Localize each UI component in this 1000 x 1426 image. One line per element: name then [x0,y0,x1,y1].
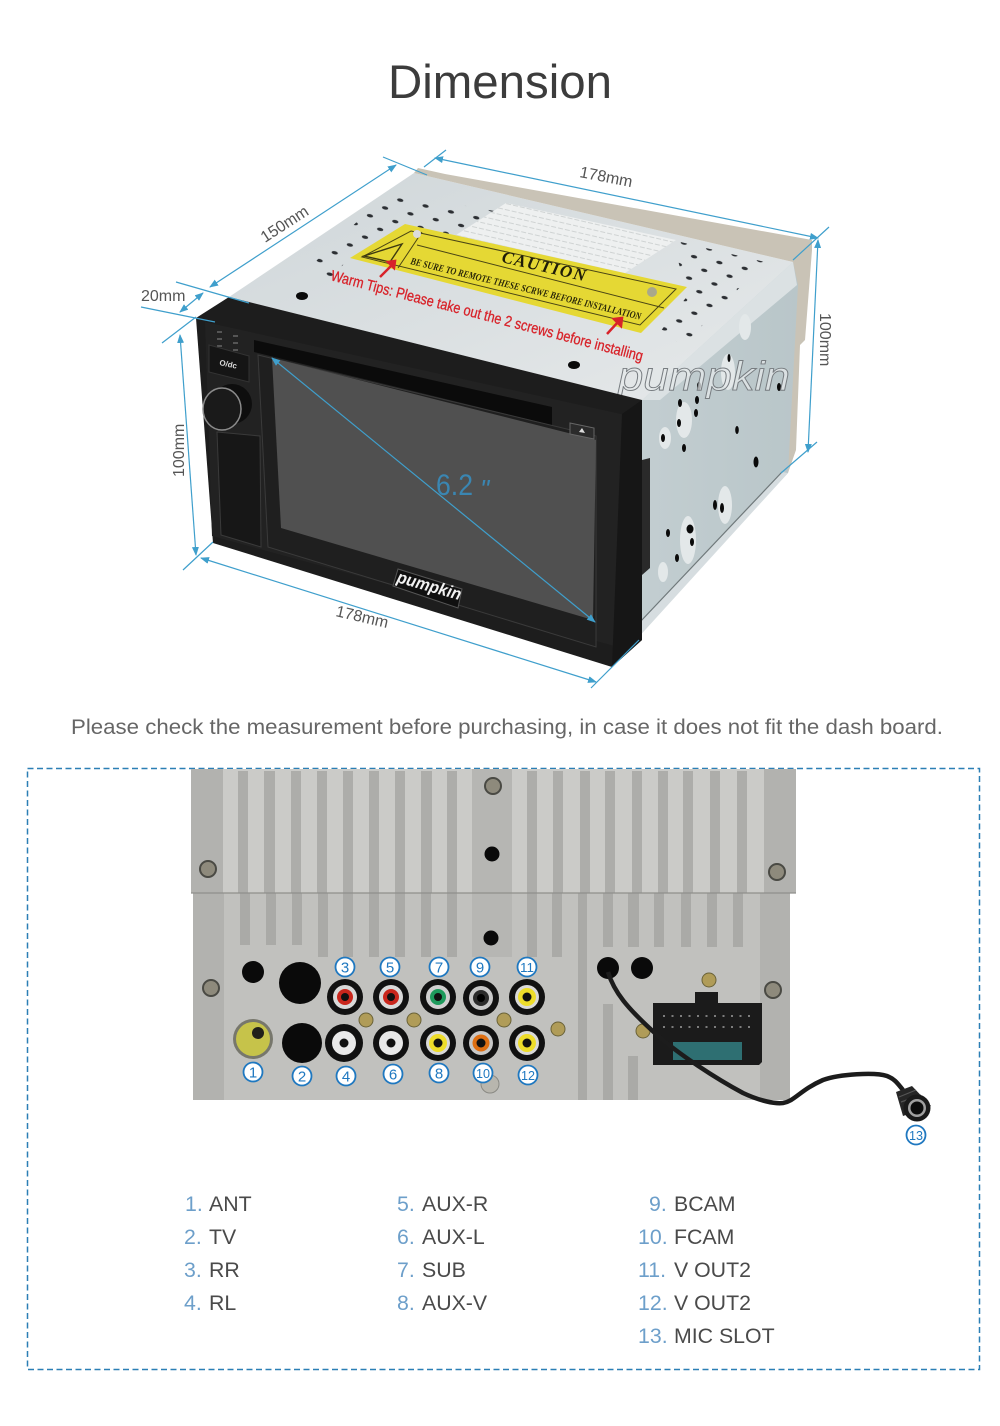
side panel lower strip [636,472,788,640]
side columns [191,769,796,1100]
warning triangle [364,244,402,262]
volume knob [203,384,252,430]
legend column 3: V OUT2 [674,1258,751,1282]
legend column 3: V OUT2 [674,1291,751,1315]
port number markers [244,958,926,1144]
marker 4 [336,1066,356,1086]
marker 3 [336,958,354,976]
RCA jack 9 [463,980,499,1016]
marker 10: 10 [476,1066,490,1081]
legend column 2: 7. [397,1258,415,1282]
marker 5: 5 [386,960,394,976]
microphone jack [896,1086,931,1122]
RCA jack 3 [327,979,363,1015]
RCA jack 12 [509,1025,545,1061]
marker 8 [430,1064,448,1082]
screen diagonal measure [272,358,595,622]
rear tan rim [414,168,812,473]
legend column 1: ANT [209,1192,252,1216]
legend column 2: AUX-R [422,1192,488,1216]
warm tips text: Warm Tips: Please take out the 2 screws before installing [329,267,645,365]
marker 8: 8 [435,1066,443,1082]
RCA jack 7 [420,979,456,1015]
centre block [472,769,512,957]
marker 2 [292,1066,312,1086]
side edge of frame [612,400,642,667]
legend column 1 [184,1192,252,1315]
side mounting tab [642,458,650,575]
100mm left line [180,335,196,555]
legend column 2 [397,1192,488,1315]
screen diagonal measure: " [480,474,491,504]
preset markers [217,332,238,350]
marker 9 [470,958,490,976]
caution label: BE SURE TO REMOTE THESE SCRWE BEFORE INSTALLATION [409,256,643,323]
marker 12: 12 [521,1068,535,1083]
screen bezel [258,355,596,647]
screw holes in top plate [296,292,580,369]
RCA jack 4 [325,1024,363,1062]
marker 13 [906,1126,926,1144]
depth label: 150mm [258,203,312,246]
marker 4: 4 [342,1068,350,1086]
legend column 2: 5. [397,1192,415,1216]
178mm bottom line [201,558,596,682]
top cover plate [229,173,793,400]
legend column 3: 11. [638,1258,666,1282]
marker 1: 1 [249,1064,257,1082]
legend column 1: RR [209,1258,240,1282]
legend column 3: 9. [649,1192,667,1216]
legend column 3: MIC SLOT [674,1324,775,1348]
lower centre screw [481,1075,499,1093]
upper fins [238,771,747,893]
legend column 3: BCAM [674,1192,736,1216]
legend column 3: FCAM [674,1225,734,1249]
brass screws [359,973,716,1038]
150mm line [210,165,396,287]
side panel holes [661,354,781,562]
marker 6: 6 [389,1066,397,1084]
legend column 1: 3. [184,1258,202,1282]
legend column 2: AUX-L [422,1225,485,1249]
left height label: 100mm [171,424,188,477]
lower casing [193,893,790,1100]
ventilation dots right [660,240,765,345]
178mm top line [435,158,818,238]
RCA jack 8 [420,1025,456,1061]
dimension labels [141,164,833,632]
front logo: pumpkin [394,567,464,604]
bottom width label: 178mm [334,603,390,632]
screen diagonal measure: 6.2 [436,469,473,502]
upper casing [191,769,796,893]
legend column 3 [638,1192,775,1348]
legend column 2: AUX-V [422,1291,488,1315]
marker 7 [430,958,448,976]
marker 11: 11 [520,960,534,975]
bezel label: 20mm [141,288,185,305]
caution label [350,224,687,333]
title: Dimension [388,55,612,108]
RCA jack 11 [509,979,545,1015]
legend column 2: SUB [422,1258,466,1282]
20mm line [180,293,203,312]
lower fins [240,893,743,1100]
white sticker [456,203,676,273]
upper side chamfer [642,262,797,400]
top width label: 178mm [578,164,634,191]
dashed panel border [28,768,980,1370]
legend column 3: 12. [638,1291,668,1315]
eject button [570,423,594,439]
microphone cable [608,972,903,1103]
legend column 1: 4. [184,1291,202,1315]
marker 1 [244,1062,262,1082]
100mm right line [808,240,818,452]
marker 3: 3 [341,960,349,976]
watermark logo: pumpkin [616,353,790,399]
RCA jack 6 [373,1025,409,1061]
rear panel photo [191,769,931,1122]
legend column 1: RL [209,1291,236,1315]
legend column 1: 1. [185,1192,203,1216]
marker 7: 7 [435,960,443,976]
marker 10 [474,1064,492,1082]
legend column 3: 13. [638,1324,668,1348]
side strip crease [640,472,782,622]
right height label: 100mm [816,313,833,366]
extension lines [141,150,829,688]
legend column 1: TV [209,1225,237,1249]
power button [209,345,249,382]
caption: Please check the measurement before purchasing, in case it does not fit the dash board. [71,715,943,739]
marker 12 [518,1066,538,1084]
marker 5 [380,958,400,976]
legend column 2: 8. [397,1291,415,1315]
red arrows [380,261,622,334]
marker 2: 2 [298,1068,306,1086]
wiring harness socket [653,992,762,1065]
dimension lines [141,150,829,688]
legend column 1: 2. [184,1225,202,1249]
screen [272,358,596,620]
marker 13: 13 [909,1128,923,1143]
side panel [633,262,798,640]
RCA jack 10 [463,1025,499,1061]
power button: O/dc [219,358,238,371]
screws [200,778,785,998]
marker 9: 9 [476,960,484,976]
lower left flap [217,432,261,547]
antenna connector [233,1019,273,1059]
RCA jack 5 [373,979,409,1015]
marker 11 [518,958,536,976]
legend column 3: 10. [638,1225,668,1249]
legend column 2: 6. [397,1225,415,1249]
front panel [196,297,642,667]
round holes [242,846,653,1063]
ventilation dots left [315,192,500,278]
embossed side bosses [658,314,751,582]
marker 6 [384,1064,402,1084]
casing seam [191,892,796,894]
disc slot [254,340,552,425]
caution label: CAUTION [500,247,589,285]
head unit product photo [196,168,812,667]
